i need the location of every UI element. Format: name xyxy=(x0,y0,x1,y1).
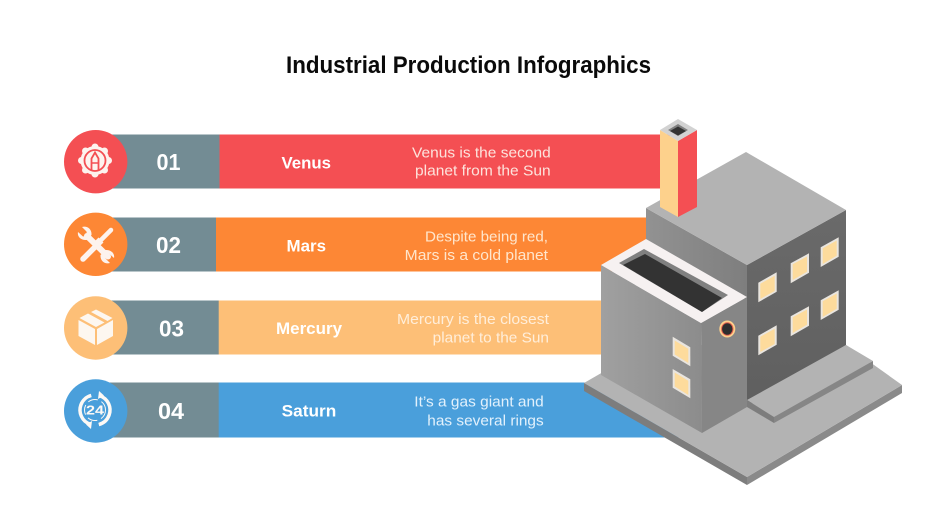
row 2: Mars xyxy=(64,213,652,276)
number bar 02 xyxy=(96,218,216,272)
description: Mercury: Mercury is the closest xyxy=(397,311,550,328)
entrance step xyxy=(747,345,873,423)
windows on left wall xyxy=(673,337,690,398)
windows on right wall xyxy=(758,237,839,355)
number bar 01 xyxy=(96,134,220,188)
icon circle: 24 hour service xyxy=(64,379,127,443)
heading: Venus: Venus xyxy=(282,153,331,172)
round vent xyxy=(719,320,735,338)
front block right wall xyxy=(701,297,747,433)
number bar 04 xyxy=(96,382,219,438)
icon circle: 24 hour service: 24 xyxy=(86,404,104,418)
number 04: 04 xyxy=(158,398,184,424)
front block roof rim xyxy=(601,239,747,323)
icon circle: wrench and screwdriver xyxy=(64,213,127,276)
icon circle: gear with pencil xyxy=(64,130,127,193)
chimney xyxy=(660,119,697,217)
description: Mars xyxy=(405,229,549,264)
ground slab xyxy=(584,345,902,485)
title: Industrial Production Infographics xyxy=(286,52,651,79)
colour bar: Mercury xyxy=(215,300,607,354)
colour bar: Mars xyxy=(212,218,652,272)
colour bar: Saturn xyxy=(215,382,685,438)
row 4: Saturn xyxy=(64,379,685,443)
description: Saturn: has several rings xyxy=(427,412,544,429)
icon circle: package box xyxy=(64,296,127,360)
front block left wall xyxy=(601,265,702,433)
row 1: Venus xyxy=(64,130,670,193)
description: Venus: Venus is the second xyxy=(412,144,551,162)
description: Venus: planet from the Sun xyxy=(415,163,551,180)
number 02: 02 xyxy=(156,232,181,258)
description: Venus xyxy=(412,144,551,180)
heading: Saturn: Saturn xyxy=(282,402,336,421)
factory building illustration xyxy=(584,119,902,485)
description: Mars: Mars is a cold planet xyxy=(405,247,549,264)
number bar 03 xyxy=(96,300,219,354)
row 3: Mercury xyxy=(64,296,607,360)
roof xyxy=(646,152,846,265)
description: Mercury: planet to the Sun xyxy=(433,330,549,347)
heading: Mercury: Mercury xyxy=(276,319,343,338)
colour bar: Venus xyxy=(215,134,670,188)
right side wall xyxy=(747,210,846,407)
description: Saturn: It’s a gas giant and xyxy=(414,394,544,411)
description: Saturn xyxy=(414,394,544,429)
heading: Mars: Mars xyxy=(286,237,326,256)
description: Mercury xyxy=(397,311,550,347)
number 01: 01 xyxy=(156,149,181,175)
description: Mars: Despite being red, xyxy=(425,229,548,246)
number 03: 03 xyxy=(159,315,184,341)
upper left wall xyxy=(646,208,747,300)
